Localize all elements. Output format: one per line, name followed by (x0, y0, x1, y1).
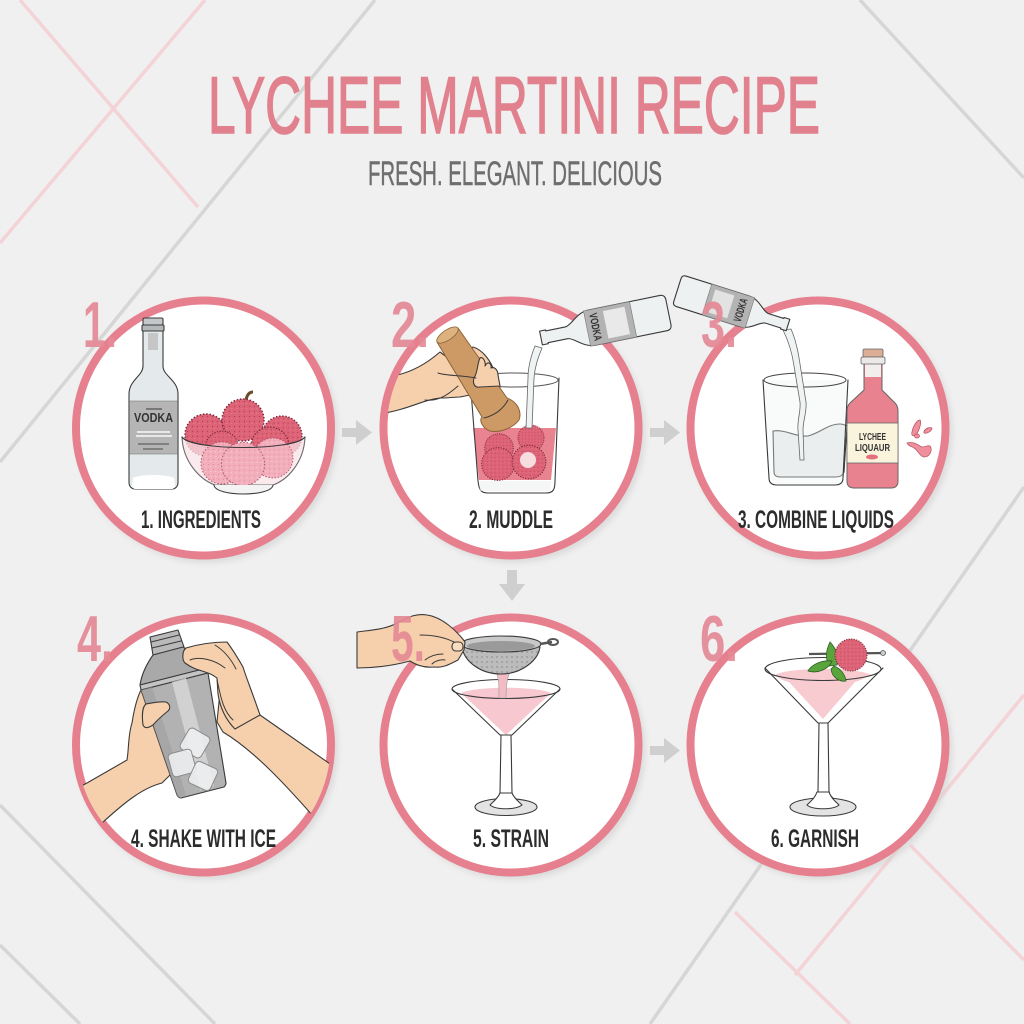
panel: step 2 muddle (380, 300, 646, 563)
arrow: step 2 to 5 (499, 570, 525, 601)
icon: pouring bottle over step 2: VODKA (586, 312, 604, 342)
arrow: step 2 to 3 (650, 420, 680, 445)
label: 2. MUDDLE (469, 506, 553, 534)
fingers (183, 642, 260, 729)
ice cubes (167, 727, 219, 792)
icon: lychee liqueur bottle: LYCHEE (859, 431, 886, 443)
icon: hands and shaker (82, 630, 330, 823)
icon: glass with lychees (470, 373, 559, 493)
icon: pouring bottle over step 3 (673, 275, 806, 460)
icon: pouring bottle over step 3: VODKA (732, 297, 751, 324)
icon: lychee liqueur bottle: LIQUAUR (855, 442, 890, 454)
icon: martini glass (765, 658, 883, 816)
arrow: step 5 to 6 (650, 738, 680, 763)
step numbers: 4. (77, 602, 113, 675)
icon: hand (357, 615, 465, 668)
panel: step 1 ingredients (76, 300, 338, 563)
panel: step 6 garnish (690, 618, 952, 880)
label: 3. COMBINE LIQUIDS (738, 506, 894, 534)
step numbers: 5. (391, 602, 425, 675)
icon: martini glass (452, 672, 560, 816)
step numbers: 3. (701, 288, 737, 361)
subtitle: FRESH. ELEGANT. DELICIOUS (368, 155, 662, 193)
step numbers: 2. (391, 288, 429, 361)
icon: hand holding pestle (380, 324, 520, 431)
icon: strainer (461, 636, 558, 674)
panel: step 4 shake with ice (70, 618, 338, 880)
step numbers (77, 288, 738, 675)
icon: garnish (808, 639, 886, 681)
icon: vodka bottle (129, 318, 178, 489)
left arm (82, 690, 170, 823)
shaker body (140, 630, 226, 798)
label: 1. INGREDIENTS (141, 506, 261, 534)
icon: vodka bottle: VODKA (134, 411, 173, 425)
panel: step 3 combine liquids (690, 300, 952, 563)
arrow: step 1 to 2 (342, 420, 372, 445)
label: 4. SHAKE WITH ICE (131, 825, 276, 853)
icon: lychee bowl (182, 392, 305, 494)
icon: lychee liqueur bottle (847, 349, 898, 488)
step numbers: 1. (83, 288, 117, 361)
icon: splashes (907, 420, 932, 457)
icon: glass with liquid (763, 373, 848, 485)
label: 6. GARNISH (771, 825, 859, 853)
step numbers: 6. (700, 602, 738, 675)
right arm (216, 700, 330, 814)
panel: step 5 strain (357, 615, 646, 880)
icon: pouring bottle over step 2 (526, 294, 672, 428)
label: 5. STRAIN (473, 825, 549, 853)
